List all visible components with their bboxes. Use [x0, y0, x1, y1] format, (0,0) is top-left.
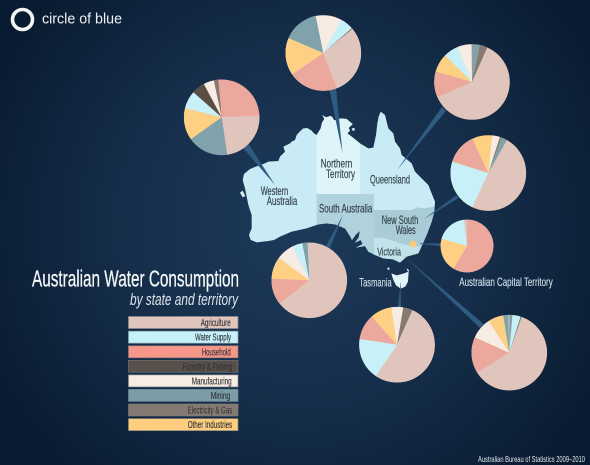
- pie: Western Australia: [184, 80, 260, 155]
- legend item: Manufacturing: Manufacturing: [192, 376, 232, 387]
- pie: Victoria: [472, 315, 547, 390]
- legend item: Agriculture: Agriculture: [201, 318, 231, 329]
- label: Victoria: Victoria: [377, 247, 402, 259]
- label: Queensland: Queensland: [370, 172, 410, 186]
- legend item: Other Industries: Other Industries: [188, 420, 232, 431]
- connector: Western Australia: [243, 144, 275, 185]
- pie: South Australia: [272, 242, 347, 318]
- label: New South Wales: Wales: [396, 223, 416, 237]
- legend item: Water Supply: Water Supply: [195, 333, 231, 344]
- connector: Australian Capital Territory: [420, 244, 444, 246]
- label: Northern Territory: [321, 156, 355, 181]
- label: South Australia: South Australia: [319, 201, 373, 215]
- legend item: Electricity & Gas: Electricity & Gas: [188, 406, 232, 416]
- pie: Australian Capital Territory: [441, 220, 493, 272]
- connector: Victoria: [403, 255, 484, 328]
- connector: New South Wales: [424, 195, 458, 219]
- subtitle: by state and territory: [130, 290, 239, 309]
- logo: circle of blue: [12, 10, 122, 30]
- connector: Northern Territory: [329, 88, 342, 153]
- marker: Australian Capital Territory: [410, 241, 416, 247]
- legend item: Mining: Mining: [211, 391, 230, 402]
- label: New South Wales: New South: [382, 213, 418, 227]
- label: Tasmania: Tasmania: [359, 276, 392, 290]
- pie: New South Wales: [450, 135, 526, 211]
- pie: Queensland: [434, 44, 510, 120]
- logo wordmark: circle of blue: [42, 10, 122, 28]
- pie: Tasmania: [359, 307, 435, 382]
- icon: ring: [12, 10, 32, 30]
- legend item: Household: Household: [202, 347, 231, 358]
- label: Western Australia: [261, 184, 298, 208]
- map: small islands: [240, 128, 409, 272]
- title: Australian Water Consumption: [32, 266, 239, 292]
- label: New South Wales: [382, 213, 418, 237]
- label: Northern Territory: Territory: [326, 167, 355, 181]
- label: Western Australia: Western: [261, 184, 288, 198]
- label: Northern Territory: Northern: [321, 156, 352, 170]
- map: state regions: [242, 112, 435, 262]
- connector: Queensland: [397, 107, 446, 170]
- label: Western Australia: Australia: [267, 194, 298, 208]
- map: Tasmania: [391, 272, 409, 289]
- map of Australia: [240, 112, 435, 289]
- pie: Northern Territory: [286, 15, 361, 91]
- legend item: Forestry & Fishing: Forestry & Fishing: [183, 362, 232, 373]
- connector: South Australia: [326, 215, 343, 248]
- connector: Tasmania: [398, 281, 401, 310]
- legend: [128, 316, 238, 431]
